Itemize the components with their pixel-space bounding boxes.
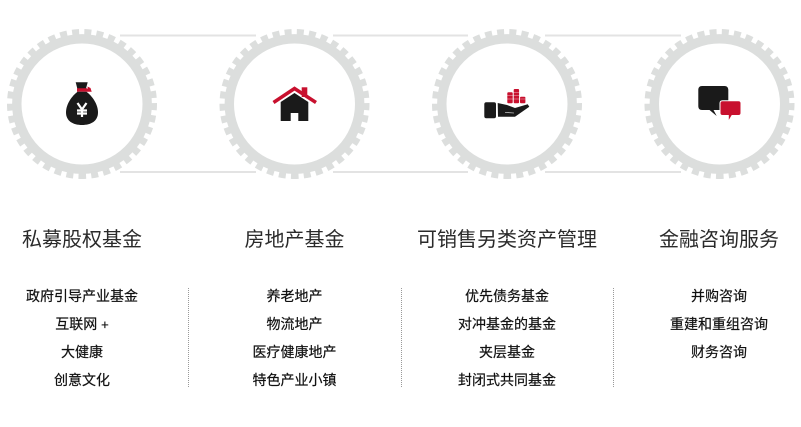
- list: 房地产基金 items: [252, 288, 336, 388]
- connector lines: [120, 36, 681, 172]
- list: 房地产基金 items: 医疗健康地产: [252, 344, 336, 360]
- gear 3: [431, 28, 583, 180]
- gear 2: [219, 28, 370, 180]
- list: 金融咨询服务 items: 重建和重组咨询: [670, 316, 768, 332]
- list: 可销售另类资产管理 items: 优先债务基金: [465, 288, 549, 304]
- heading: 私募股权基金: 私募股权基金: [22, 229, 142, 251]
- separator 1: [188, 288, 189, 387]
- list: 可销售另类资产管理 items: 对冲基金的基金: [458, 316, 556, 332]
- gear 4: [644, 28, 795, 180]
- icon: hand holding coins: [484, 89, 529, 118]
- list: 金融咨询服务 items: 并购咨询: [691, 288, 747, 304]
- list: 可销售另类资产管理 items: 夹层基金: [479, 344, 535, 360]
- list: 可销售另类资产管理 items: [458, 288, 556, 388]
- column 2: [244, 228, 344, 388]
- gear 1: [6, 28, 158, 180]
- list: 可销售另类资产管理 items: 封闭式共同基金: [458, 372, 556, 388]
- column 3: [417, 229, 597, 388]
- list: 房地产基金 items: 特色产业小镇: [252, 372, 336, 388]
- list: 私募股权基金 items: 互联网 +: [55, 316, 109, 332]
- heading: 房地产基金: 房地产基金: [244, 229, 344, 251]
- list: 金融咨询服务 items: [670, 288, 768, 360]
- heading: 可销售另类资产管理: 可销售另类资产管理: [417, 229, 597, 251]
- separator 2: [401, 288, 402, 387]
- list: 私募股权基金 items: [26, 288, 138, 388]
- icon: house: [274, 87, 316, 121]
- column 1: [22, 228, 142, 388]
- separator 3: [613, 288, 614, 387]
- list: 房地产基金 items: 养老地产: [266, 288, 322, 304]
- list: 私募股权基金 items: 大健康: [61, 344, 103, 360]
- list: 金融咨询服务 items: 财务咨询: [691, 344, 747, 360]
- column 4: [659, 228, 779, 360]
- icon: money bag: [66, 82, 98, 125]
- heading: 金融咨询服务: 金融咨询服务: [659, 229, 779, 251]
- list: 私募股权基金 items: 政府引导产业基金: [26, 288, 138, 304]
- list: 私募股权基金 items: 创意文化: [54, 372, 110, 388]
- list: 房地产基金 items: 物流地产: [266, 316, 322, 332]
- icon: speech bubbles: [698, 86, 741, 122]
